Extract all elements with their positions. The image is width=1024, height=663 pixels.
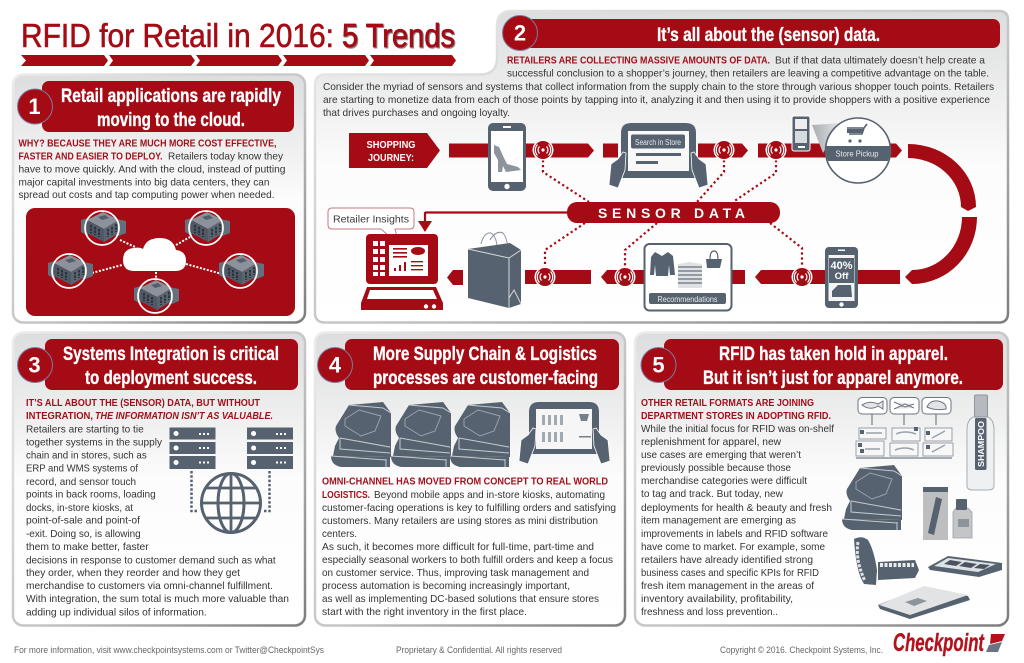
icon: stacked jeans — [331, 402, 510, 467]
body text 5: fresh item management in the areas of — [641, 581, 814, 592]
body text 1: have to move quickly. And with the cloud, instead of putting — [18, 164, 286, 176]
header 3 — [18, 339, 298, 390]
body text 5: use cases are emerging that weren’t — [641, 450, 801, 461]
icon: tablet — [878, 586, 970, 619]
body text 3: With integration, the sum total is much more valuable than — [26, 594, 289, 605]
icon: search in store tablet — [609, 123, 708, 188]
cloud network illustration — [26, 208, 295, 316]
icon: cloud — [123, 238, 186, 271]
body text 1 — [18, 138, 286, 201]
body text 3: docks, in-store kiosks, at — [26, 503, 133, 514]
body text 2 — [323, 56, 994, 119]
shopping journey label: SHOPPING — [366, 140, 416, 151]
body text 4: customers. Many retailers are using stores as mini distribution — [322, 516, 598, 527]
body text 3: ERP and WMS systems of — [26, 464, 138, 475]
icon: recommendations panel — [644, 244, 732, 310]
header 3: 3 — [28, 352, 41, 378]
panel 2: sensor data — [315, 11, 1008, 322]
body text 2: Consider the myriad of sensors and systems that collect information from the supply chain to the store through various shopper touch points. Retailers — [323, 82, 994, 93]
body text 2: But if that data ultimately doesn’t help create a — [775, 56, 985, 66]
body text 4: customer-facing operations is key to fulfilling orders and satisfying — [322, 503, 616, 514]
title: 5 Trends — [342, 17, 455, 54]
body text 4: especially seasonal workers to both fulfill orders and keep a focus — [322, 555, 613, 566]
title: RFID for Retail in 2016: — [21, 17, 334, 54]
body text 3: decisions in response to customer demand such as what — [26, 555, 276, 566]
retailer insights callout and arrow — [328, 208, 432, 245]
body text 5: freshness and loss prevention.. — [641, 607, 778, 618]
header 1: 1 — [28, 94, 41, 119]
body text 4 — [322, 477, 616, 618]
body text 5: retailers have already identified strong — [641, 555, 813, 566]
body text 1: major capital investments into big data centers, they can — [18, 178, 270, 188]
body text 3: them to make better, faster — [26, 542, 149, 553]
body text 5: deployments for health & beauty and fresh — [641, 503, 832, 514]
body text 5: merchandise categories were difficult — [641, 476, 807, 487]
panel 3: systems integration — [13, 332, 305, 626]
panel 1: cloud — [13, 74, 305, 322]
header 4: 4 — [329, 352, 342, 378]
icon: phone with shoe — [488, 123, 526, 191]
body text 3: record, and sensor touch — [26, 477, 136, 488]
body text 1: FASTER AND EASIER TO DEPLOY. — [18, 152, 163, 162]
body text 2: are starting to monetize data from each of those points by tapping into it, analyzing it and then using it to provide shoppers with a positive experience — [323, 95, 990, 106]
footer: confidentiality: Proprietary & Confidential. All rights reserved — [396, 644, 562, 655]
icon: fitness bands — [854, 537, 919, 585]
icon: coupon phone: 40% — [830, 260, 853, 272]
icon: flat phone — [928, 556, 1002, 577]
body text 5: While the initial focus for RFID was on-shelf — [641, 424, 834, 435]
header 5: RFID has taken hold in apparel. — [719, 344, 948, 365]
body text 5: DEPARTMENT STORES IN ADOPTING RFID. — [641, 411, 831, 422]
body text 3: merchandise to customers via omni-channel fulfillment. — [26, 581, 273, 592]
footer: copyright: Copyright © 2016. Checkpoint Systems, Inc. — [720, 644, 883, 655]
body text 3: Retailers are starting to tie — [26, 425, 144, 436]
header 2 — [502, 16, 1000, 50]
body text 4: on customer service. Thus, improving task management and — [322, 568, 589, 579]
icon: coupon phone — [825, 247, 858, 308]
body text 5: business cases and specific KPIs for RFID — [641, 568, 819, 579]
header 4 — [318, 339, 619, 390]
dotted sensor links — [543, 160, 802, 267]
body text 4: LOGISTICS. — [322, 490, 370, 501]
body text 5: have come to market. For example, some — [641, 542, 825, 553]
body text 4: process automation is becoming increasingly important, — [322, 581, 570, 592]
header 3: to deployment success. — [85, 368, 257, 389]
journey arrows — [349, 133, 977, 285]
body text 5: item management are emerging as — [641, 516, 796, 526]
body text 4: Beyond mobile apps and in-store kiosks, automating — [374, 490, 605, 501]
icon: jeans stack — [842, 465, 902, 530]
body text 3 — [26, 398, 289, 618]
header 5: But it isn’t just for apparel anymore. — [703, 368, 963, 389]
header 1: moving to the cloud. — [97, 110, 245, 131]
body text 3: IT’S ALL ABOUT THE (SENSOR) DATA, BUT WITHOUT — [26, 398, 261, 409]
body text 4: as well as implementing DC-based solutions that ensure stores — [322, 594, 599, 605]
body text 2: successful conclusion to a shopper’s journey, then retailers are leaving a competitive advantage on the table. — [507, 68, 989, 80]
sensor data pill — [425, 202, 780, 223]
header 4: processes are customer-facing — [373, 368, 598, 389]
header 3: Systems Integration is critical — [63, 344, 279, 365]
header 2: It’s all about the (sensor) data. — [657, 25, 880, 46]
panel 5: apparel — [635, 332, 1008, 626]
icon: fresh food shelf — [856, 398, 953, 458]
header 5: 5 — [652, 352, 665, 378]
header 1 — [18, 81, 294, 132]
icon: online store tablet — [519, 402, 610, 464]
body text 3: point-of-sale and point-of — [26, 516, 140, 527]
body text 1: spread out costs and tap computing power when needed. — [18, 190, 274, 201]
icon: laptop dashboard — [361, 234, 443, 310]
body text 5: to tag and track. But today, new — [641, 489, 783, 500]
body text 5: replenishment for apparel, new — [641, 437, 781, 448]
title: 5 Trends — [343, 18, 456, 55]
chevron divider — [21, 55, 456, 66]
icon: shopping bag — [468, 232, 521, 308]
panel 4: supply chain — [315, 332, 625, 626]
icon: shampoo bottle — [967, 395, 994, 490]
body text 5: previously possible because those — [641, 463, 791, 474]
shopping journey label: JOURNEY: — [368, 153, 414, 164]
body text 3: they order, when they reorder and how they get — [26, 568, 240, 579]
body text 3: together systems in the supply — [26, 438, 163, 448]
body text 3: INTEGRATION, — [26, 411, 93, 422]
body text 2: RETAILERS ARE COLLECTING MASSIVE AMOUNTS OF DATA. — [507, 56, 770, 66]
body text 4: As such, it becomes more difficult for full-time, part-time and — [322, 542, 594, 553]
icon: sensors — [532, 140, 812, 288]
icon: kiosk and store pickup: Store Pickup — [836, 150, 879, 158]
body text 3: -exit. Doing so, is allowing — [26, 529, 141, 540]
shopping journey label — [366, 140, 416, 164]
body text 4: OMNI-CHANNEL HAS MOVED FROM CONCEPT TO REAL WORLD — [322, 477, 608, 488]
body text 2: that drives purchases and ongoing loyalty. — [323, 108, 510, 119]
footer: contact: For more information, visit www.checkpointsystems.com or Twitter@CheckpointSys — [14, 644, 324, 655]
body text 3: chain and in stores, such as — [26, 451, 147, 462]
body text 3: THE INFORMATION ISN’T AS VALUABLE. — [95, 411, 273, 422]
body text 5: inventory availability, profitability, — [641, 594, 793, 605]
body text 3: points in back rooms, loading — [26, 490, 156, 501]
icon: kiosk and store pickup — [792, 116, 890, 183]
body text 3: adding up individual silos of information. — [26, 607, 207, 618]
body text 5: OTHER RETAIL FORMATS ARE JOINING — [641, 398, 814, 409]
icon: search in store tablet: Search in Store — [635, 138, 681, 147]
icon: recommendations panel: Recommendations — [658, 295, 718, 304]
icon: servers and globe — [170, 428, 293, 532]
sensor data pill: SENSOR DATA — [598, 205, 745, 221]
header 2: 2 — [514, 20, 526, 46]
icon: shampoo bottle: SHAMPOO — [976, 421, 986, 467]
body text 1: WHY? BECAUSE THEY ARE MUCH MORE COST EFFECTIVE, — [18, 138, 277, 150]
body text 4: centers. — [322, 529, 357, 540]
body text 5 — [641, 398, 834, 618]
body text 1: Retailers today know they — [168, 152, 284, 162]
header 4: More Supply Chain & Logistics — [373, 344, 597, 365]
body text 5: improvements in labels and RFID software — [641, 529, 828, 540]
header 1: Retail applications are rapidly — [61, 86, 281, 107]
header 5 — [641, 339, 1003, 390]
icon: mascara and nail polish — [923, 487, 972, 540]
icon: coupon phone: Off — [835, 271, 849, 282]
retailer insights callout and arrow: Retailer Insights — [333, 214, 409, 226]
body text 4: start with the right inventory in the first place. — [322, 607, 527, 618]
